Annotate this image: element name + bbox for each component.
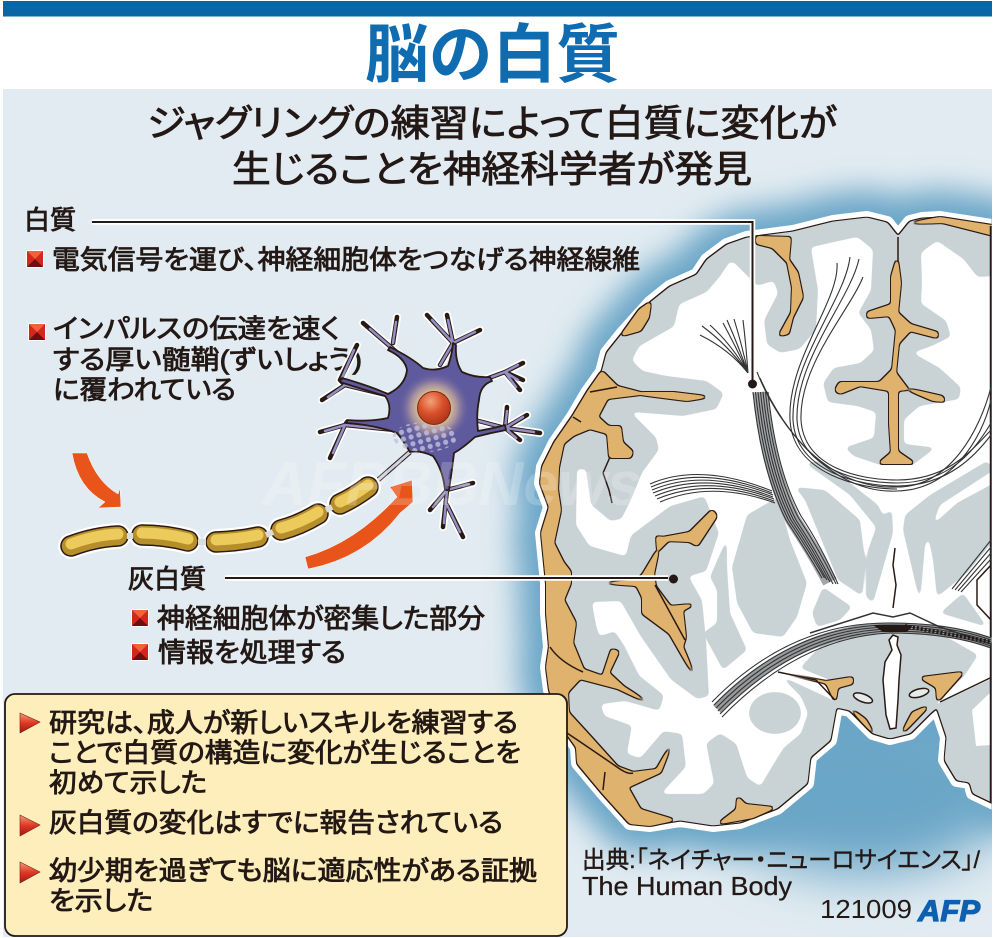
finding 1: 研究は、成人が新しいスキルを練習する (49, 708, 518, 738)
arrow: up-right (305, 480, 413, 569)
white matter tract (753, 392, 838, 584)
subtitle: ジャグリングの練習によって白質に変化が (147, 103, 838, 144)
finding 3: を示した (49, 886, 153, 916)
arrow: down-right (72, 453, 121, 508)
subtitle (147, 103, 838, 190)
text: myelin: に覆われている (53, 375, 236, 405)
bullet icon (131, 643, 149, 661)
finding 1: ことで白質の構造に変化が生じることを (49, 738, 521, 768)
dotted highlight (393, 422, 457, 452)
finding 1: 初めて示した (49, 768, 207, 798)
finding 2: 灰白質の変化はすでに報告されている (49, 808, 503, 838)
heading: white matter: 白質 (24, 205, 76, 235)
panel: findings (5, 694, 567, 936)
neuron cell body (340, 343, 506, 490)
neuron illustration (320, 315, 540, 537)
source credit (582, 847, 980, 901)
finding 3: 幼少期を過ぎても脳に適応性がある証拠 (49, 856, 537, 886)
source credit: 出典:「ネイチャー・ニューロサイエンス」/ (582, 847, 980, 874)
text: gray matter 1: 神経細胞体が密集した部分 (157, 604, 485, 634)
top blue bar (3, 1, 992, 16)
corpus callosum (712, 540, 991, 717)
brain cross-section (541, 218, 998, 825)
finding 3 (49, 856, 537, 916)
bullet icon (131, 609, 149, 627)
brain gray matter with outline (541, 218, 998, 825)
fan of fibres (700, 319, 748, 373)
triangle icon (20, 815, 40, 836)
nucleus (418, 392, 450, 424)
crossing fibres (650, 475, 775, 503)
sulci (orange) (541, 218, 998, 825)
white matter (577, 238, 995, 793)
myelin sheath segments (71, 485, 368, 546)
right edge line and fissures (550, 226, 991, 803)
brain white halo (541, 218, 998, 825)
leader: white matter (92, 222, 757, 388)
finding 1 (49, 708, 521, 798)
neuron dendrites (320, 315, 540, 537)
subcortical nuclei (703, 461, 994, 802)
leader: gray matter (225, 574, 678, 584)
text: myelin (53, 314, 362, 405)
watermark: AFPBBNews (260, 450, 642, 519)
subtitle: 生じることを神経科学者が発見 (232, 149, 752, 190)
date code: 121009 (820, 894, 912, 924)
bullet icon (28, 323, 46, 341)
title: 脳の白質 (365, 19, 620, 91)
text: gray matter 2: 情報を処理する (158, 638, 346, 668)
heading: gray matter: 灰白質 (128, 564, 206, 594)
AFP logo: AFP (917, 895, 981, 928)
bullet icon (26, 250, 44, 268)
triangle icon (20, 713, 40, 733)
looping fibres (757, 257, 991, 491)
neuron axon stub (378, 452, 410, 480)
source credit: The Human Body (582, 871, 792, 901)
text: myelin: インパルスの伝達を速く (53, 314, 340, 344)
text: white matter fibres: 電気信号を運び、神経細胞体をつなげる神経線維 (52, 245, 640, 275)
blue glow behind brain (541, 218, 1000, 875)
nucleus glow (398, 372, 470, 444)
triangle icon (20, 862, 40, 883)
text: myelin: する厚い髄鞘(ずいしょう) (53, 345, 362, 375)
fibres (650, 257, 991, 717)
